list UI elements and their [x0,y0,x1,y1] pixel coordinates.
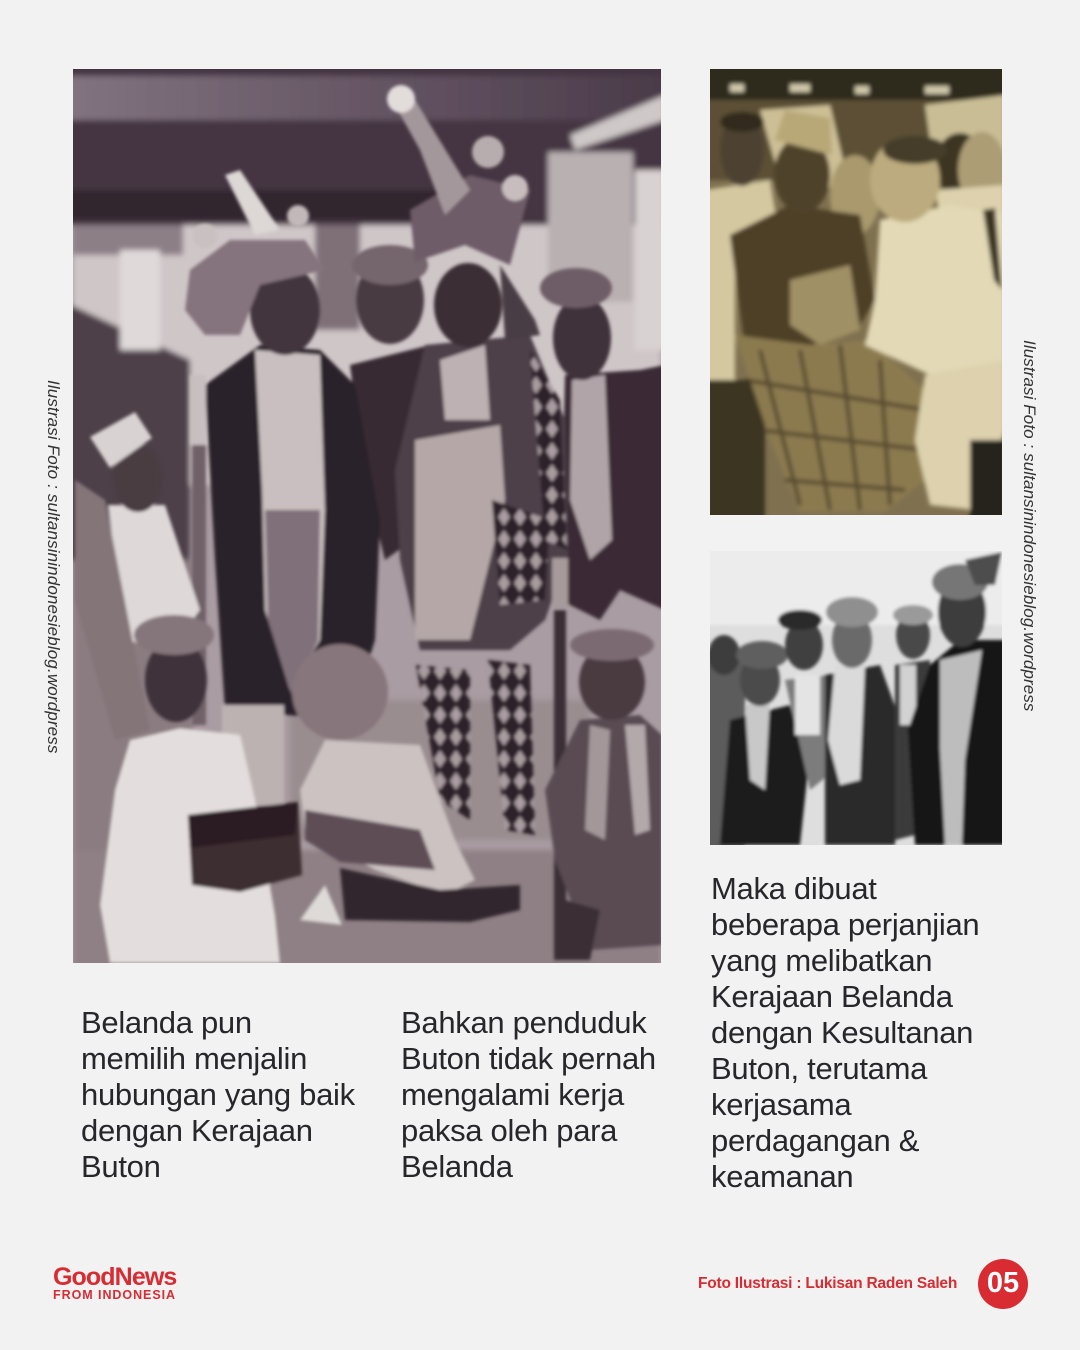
left man in coat [205,345,380,720]
caption: illustration credit: Foto Ilustrasi : Lukisan Raden Saleh [698,1275,957,1292]
caption: right photo credit: Ilustrasi Foto : sultansinindonesieblog.wordpress [1020,340,1039,712]
text block: good relations: Buton [81,1149,161,1184]
text block: agreements: Maka dibuat [711,871,877,906]
text block: no forced labour: mengalami kerja [401,1077,624,1112]
text block: good relations: Belanda pun [81,1005,252,1040]
text block: agreements: keamanan [711,1159,853,1194]
figure 3 [825,665,900,845]
figure 2 [785,675,835,790]
text block: no forced labour: Buton tidak pernah [401,1041,656,1076]
figure 5 [908,640,1005,845]
text block: good relations: dengan Kerajaan [81,1113,313,1148]
text block: good relations: hubungan yang baik [81,1077,355,1112]
text block: good relations [81,1005,356,1184]
photo: Buton royal court group portrait [73,69,661,963]
right dark sleeve figure [560,365,665,620]
text block: agreements: perdagangan & [711,1123,919,1158]
caption: left photo credit: Ilustrasi Foto : sultansinindonesieblog.wordpress [44,380,63,754]
centre man [395,335,568,650]
rear man [350,345,440,560]
text block: agreements: yang melibatkan [711,943,932,978]
sultan torso [730,205,875,350]
officer [865,205,1005,375]
photo: Sultan with Dutch officer [710,69,1002,515]
seated figure with fur [292,644,388,740]
figure 1 [720,705,808,845]
plaid sarong [735,335,930,512]
text block: no forced labour: paksa oleh para [401,1113,617,1148]
text block: no forced labour: Belanda [401,1149,513,1184]
logo: GoodNews from Indonesia: GoodNews [53,1263,176,1291]
text block: agreements: dengan Kesultanan [711,1015,973,1050]
text block: agreements: Kerajaan Belanda [711,979,953,1014]
text block: no forced labour [401,1005,656,1184]
text block: agreements: kerjasama [711,1087,851,1122]
boy in white hat [108,505,200,650]
text block: good relations: memilih menjalin [81,1041,307,1076]
text block: no forced labour: Bahkan penduduk [401,1005,646,1040]
photo: Buton noblemen group in black and white [710,551,1002,845]
page number badge: 05 [987,1267,1019,1299]
figure 4 [895,660,935,840]
page number badge [978,1259,1028,1309]
logo: GoodNews from Indonesia: FROM INDONESIA [53,1288,176,1302]
text block: agreements: Buton, terutama [711,1051,927,1086]
right seated child [545,715,662,950]
front boy with drum [100,728,280,963]
text block: agreements [711,871,979,1194]
text block: agreements: beberapa perjanjian [711,907,979,942]
